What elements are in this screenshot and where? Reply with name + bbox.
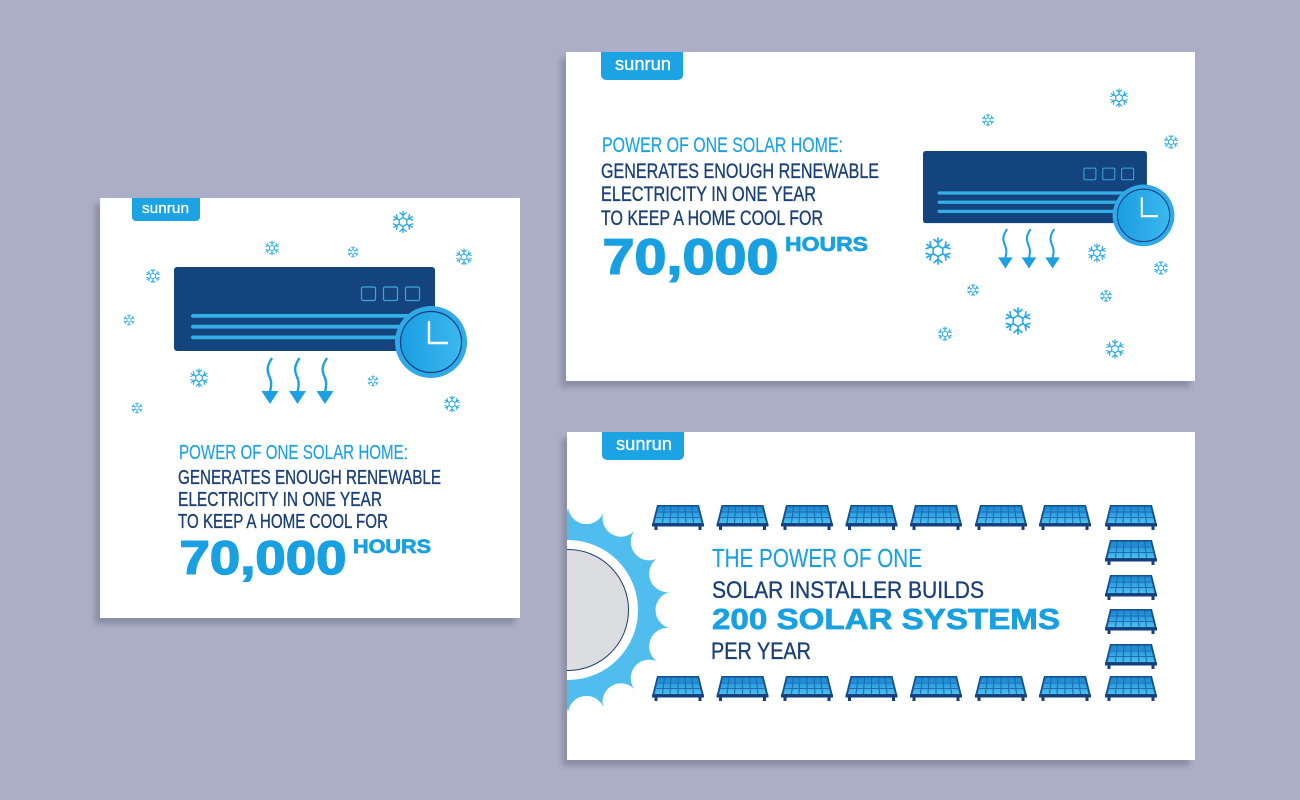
- icon: sun: [567, 508, 672, 713]
- text: body: GENERATES ENOUGH RENEWABLE: [601, 159, 879, 183]
- text: body: TO KEEP A HOME COOL FOR: [601, 206, 823, 230]
- logo: sunrun tab: [601, 52, 683, 80]
- text: body: [601, 159, 879, 230]
- text: 70,000 hours: HOURS: [353, 537, 431, 558]
- card background: [567, 432, 1195, 760]
- text: headline: POWER OF ONE SOLAR HOME:: [179, 441, 408, 464]
- logo: sunrun tab: [602, 432, 684, 460]
- text: 70,000 hours: 70,000: [180, 531, 346, 584]
- text: body: ELECTRICITY IN ONE YEAR: [601, 182, 816, 206]
- logo: sunrun tab: sunrun: [616, 434, 672, 454]
- icon: snowflakes: [123, 212, 472, 414]
- text: body: GENERATES ENOUGH RENEWABLE: [178, 466, 441, 489]
- text: per year: PER YEAR: [711, 638, 811, 665]
- text: body: ELECTRICITY IN ONE YEAR: [178, 488, 382, 511]
- text: headline: THE POWER OF ONE: [712, 543, 922, 573]
- panel: solar installer card: [560, 432, 1195, 768]
- logo: sunrun tab: sunrun: [142, 200, 189, 217]
- panel: square air conditioner card: [100, 198, 520, 618]
- text: 70,000 hours: [602, 229, 868, 285]
- icon: solar panels right column: [1105, 540, 1157, 669]
- text: 70,000 hours: HOURS: [785, 234, 868, 256]
- icon: solar panels top row: [652, 505, 1157, 530]
- text: headline: POWER OF ONE SOLAR HOME:: [602, 133, 843, 157]
- text: 70,000 hours: [180, 531, 431, 584]
- icon: solar panels bottom row: [652, 676, 1157, 701]
- text: 70,000 hours: 70,000: [602, 229, 778, 285]
- icon: air conditioner: [923, 151, 1174, 269]
- icon: air conditioner: [174, 267, 467, 404]
- card background: [566, 52, 1195, 381]
- panel: wide air conditioner card: [566, 52, 1195, 381]
- text: body: [178, 466, 441, 533]
- icon: snowflakes: [925, 89, 1178, 358]
- text: 200 solar systems: 200 SOLAR SYSTEMS: [712, 604, 1060, 636]
- icon: cold air arrows: [998, 229, 1060, 269]
- logo: sunrun tab: [132, 198, 200, 221]
- text: body: TO KEEP A HOME COOL FOR: [178, 510, 388, 533]
- card background: [100, 198, 520, 618]
- icon: clock: [1113, 184, 1174, 246]
- icon: clock: [395, 306, 467, 378]
- icon: cold air arrows: [262, 358, 334, 404]
- text: installer line: SOLAR INSTALLER BUILDS: [712, 577, 984, 604]
- logo: sunrun tab: sunrun: [615, 54, 671, 74]
